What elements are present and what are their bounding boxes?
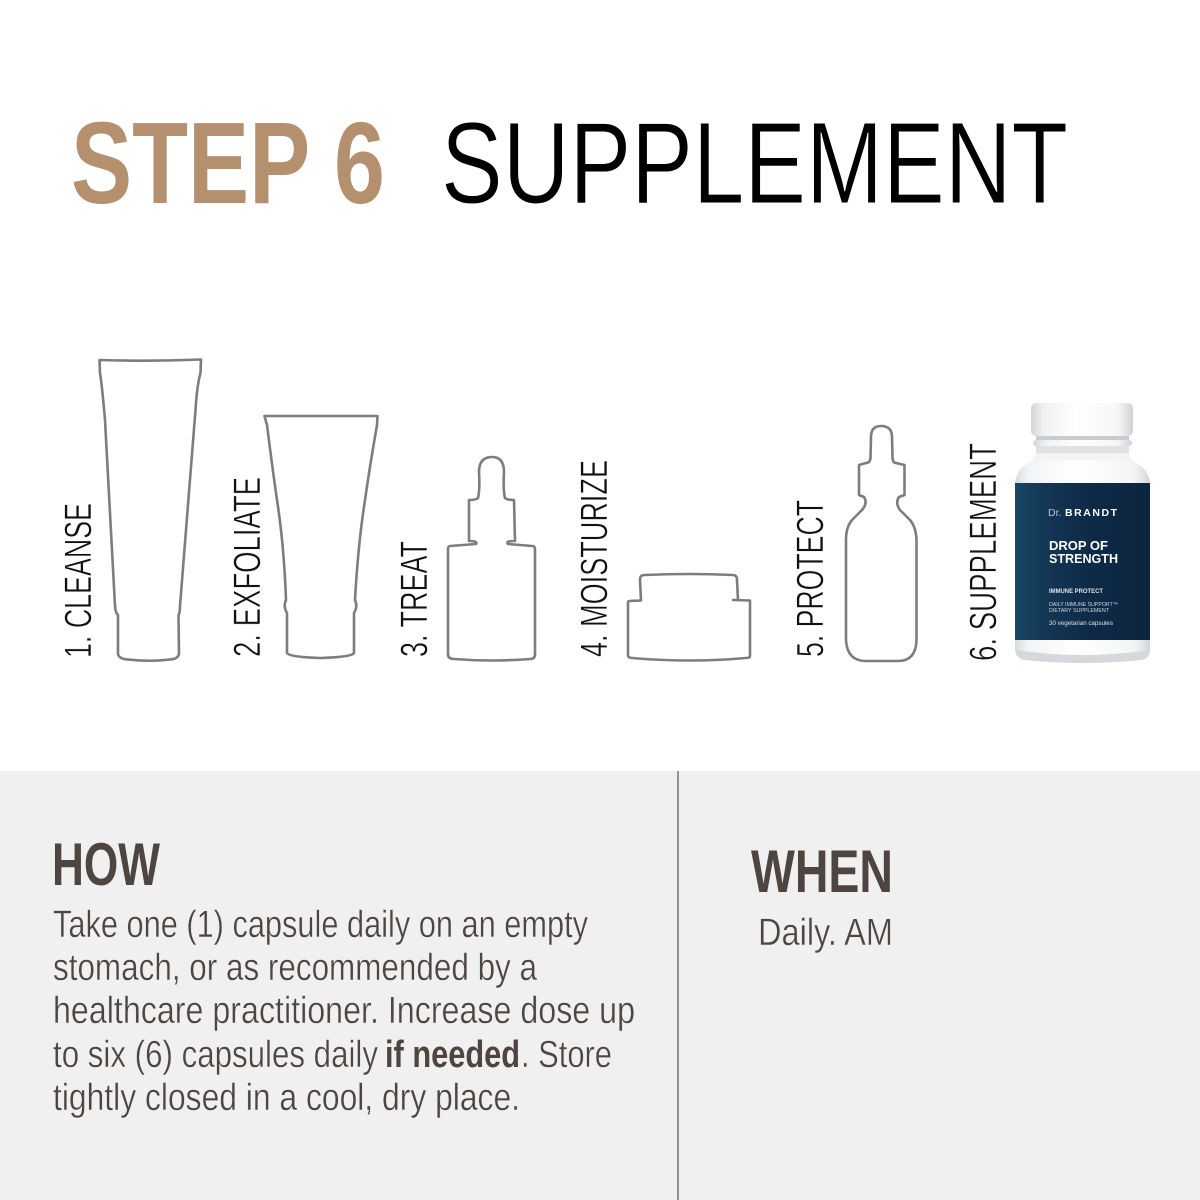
when heading: WHEN [751,838,893,905]
icon: serum bottle [846,426,916,661]
icon: exfoliant tube [264,416,378,658]
how text block: healthcare practitioner. Increase dose up [53,990,635,1032]
bottle body [1015,445,1150,663]
how text block [53,904,635,1119]
when text: Daily. AM [758,912,893,954]
title [71,98,1068,228]
icon: cleanser tube [100,360,201,661]
icon: supplement bottle [1015,403,1150,663]
step 2 label: 2. EXFOLIATE [227,477,269,657]
descriptor: IMMUNE PROTECT [1049,588,1103,595]
how text block: stomach, or as recommended by a [53,947,538,989]
bottle base shade [1015,650,1150,663]
step 1 label: 1. CLEANSE [58,503,100,658]
bottle label [1015,483,1150,640]
bottle cap [1031,403,1133,436]
brand: Dr. [1048,507,1061,519]
icon: supplement bottle: DAILY IMMUNE SUPPORT™ [1049,602,1118,608]
step number: STEP 6 [71,98,385,228]
routine steps row [58,360,1150,663]
how text block: if needed [385,1034,520,1076]
icon: supplement bottle: BRANDT [1065,507,1118,519]
step 4 label: 4. MOISTURIZE [574,460,616,657]
icon: cream jar [628,574,750,660]
how text block: . Store [521,1034,612,1076]
step 6 label: 6. SUPPLEMENT [963,443,1005,661]
how heading: HOW [52,831,160,898]
step 5 label: 5. PROTECT [790,500,832,657]
panel: when [678,771,1200,1200]
product name: DROP OF [1049,539,1108,553]
how text block: to six (6) capsules daily [53,1034,378,1076]
step 3 label: 3. TREAT [394,541,436,657]
how text block: tightly closed in a cool, dry place. [53,1077,520,1119]
icon: supplement bottle: DIETARY SUPPLEMENT [1049,608,1110,614]
how text block: Take one (1) capsule daily on an empty [53,904,588,946]
icon: supplement bottle: 30 vegetarian capsules [1049,620,1114,627]
panel: how [0,771,678,1200]
icon: dropper bottle [448,457,535,660]
icon: supplement bottle: STRENGTH [1049,552,1118,566]
